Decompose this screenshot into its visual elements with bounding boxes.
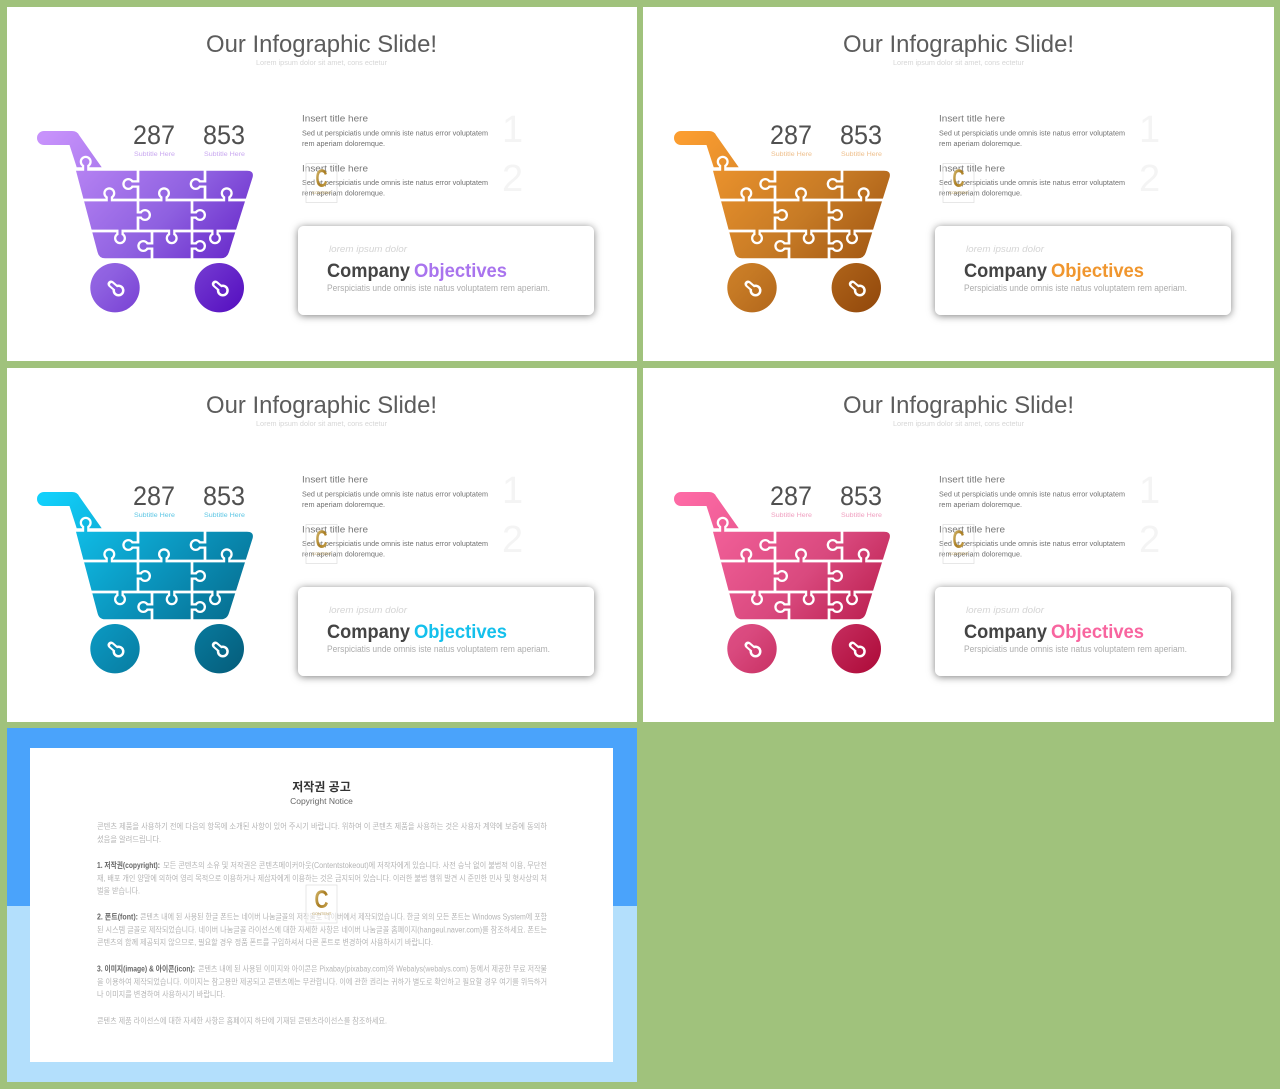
text block 2: rem aperiam doloremque.: [302, 552, 385, 558]
text block 2: [939, 524, 1125, 558]
stat: 853: Subtitle Here: [841, 512, 882, 519]
callout card: [298, 226, 594, 315]
notice section 3: 콘텐츠 내에 된 사용된 이미지와 아이콘은 Pixabay(pixabay.com)와 Webalys(webalys.com) 등에서 제공한 무료 저작물: [198, 964, 547, 974]
stat: 287: 287: [133, 481, 175, 511]
notice subheading: Copyright Notice: [290, 796, 353, 806]
text block 1: Insert title here: [939, 474, 1005, 486]
callout card: Objectives: [1051, 621, 1144, 643]
notice intro: 콘텐츠 제품을 사용하기 전에 다음의 항목에 소개된 사항이 있어 주시기 바랍니다. 위하여 이 콘텐츠 제품을 사용하는 것은 사용자 계약에 보증에 동의하: [97, 821, 547, 831]
subtitle: Lorem ipsum dolor sit amet, cons ectetur: [256, 421, 388, 428]
notice footer line: 콘텐츠 제품 라이선스에 대한 자세한 사항은 홈페이지 하단에 기재된 콘텐츠라이선스를 참조하세요.: [97, 1016, 387, 1026]
stat: 853: 853: [203, 120, 245, 150]
callout card: [935, 587, 1231, 676]
text block 2: Insert title here: [939, 524, 1005, 536]
text block 1: [939, 474, 1125, 509]
text block 1: [939, 114, 1125, 148]
notice section 3: [97, 964, 547, 999]
text block 2: Insert title here: [302, 164, 368, 174]
number 1: 1: [502, 470, 523, 512]
subtitle: Lorem ipsum dolor sit amet, cons ectetur: [893, 60, 1025, 67]
notice section 3: 나 이미지를 변경하여 사용하시기 바랍니다.: [97, 989, 225, 999]
subtitle: Lorem ipsum dolor sit amet, cons ectetur: [256, 60, 388, 67]
panel: pink slide: [643, 368, 1274, 722]
subtitle: Lorem ipsum dolor sit amet, cons ectetur: [893, 421, 1025, 428]
title: Our Infographic Slide!: [843, 392, 1074, 419]
number 1: 1: [1139, 470, 1160, 512]
callout card: Perspiciatis unde omnis iste natus voluptatem rem aperiam.: [327, 283, 550, 293]
text block 1: Sed ut perspiciatis unde omnis iste natus error voluptatem: [939, 492, 1125, 498]
watermark: [306, 885, 337, 923]
callout card: Perspiciatis unde omnis iste natus voluptatem rem aperiam.: [964, 644, 1187, 654]
callout card: [298, 587, 594, 676]
watermark: [306, 524, 337, 564]
stat: 287: 287: [133, 120, 175, 150]
panel: copyright notice slide: [7, 728, 637, 1082]
callout card: Perspiciatis unde omnis iste natus voluptatem rem aperiam.: [327, 644, 550, 654]
watermark: CONTENT: [312, 911, 332, 916]
callout card: Perspiciatis unde omnis iste natus voluptatem rem aperiam.: [964, 283, 1187, 293]
text block 1: rem aperiam doloremque.: [302, 141, 385, 148]
callout card: lorem ipsum dolor: [966, 605, 1045, 616]
text block 2: Sed ut perspiciatis unde omnis iste natus error voluptatem: [939, 541, 1125, 548]
notice intro: 셨음을 알려드립니다.: [97, 834, 161, 844]
notice section 2: 콘텐츠 내에 된 사용된 한글 폰트는 네이버 나눔글꼴의 저작물로 네이버에서 제작되었습니다. 한글 외의 모든 폰트는 Windows System에 포함: [140, 912, 547, 922]
callout card: Company: [327, 621, 410, 643]
icon: puzzle shopping cart: [674, 131, 890, 312]
text block 1: [302, 474, 488, 509]
number 1: 1: [1139, 109, 1160, 151]
text block 1: rem aperiam doloremque.: [302, 502, 385, 509]
callout card: lorem ipsum dolor: [329, 244, 408, 255]
notice heading: 저작권 공고: [292, 779, 351, 794]
callout card: Objectives: [1051, 260, 1144, 282]
text block 2: [302, 524, 488, 558]
notice section 1: 벌을 받습니다.: [97, 886, 140, 896]
notice section 1: 1. 저작권(copyright):: [97, 860, 160, 870]
title: Our Infographic Slide!: [206, 392, 437, 419]
text block 2: rem aperiam doloremque.: [939, 190, 1022, 198]
text block 2: Sed ut perspiciatis unde omnis iste natus error voluptatem: [302, 541, 488, 548]
icon: puzzle shopping cart: [37, 131, 253, 312]
text block 2: rem aperiam doloremque.: [302, 190, 385, 198]
watermark: CONTENT: [949, 551, 969, 556]
text block 1: Insert title here: [939, 114, 1005, 124]
text block 1: [302, 114, 488, 148]
stat: 287: Subtitle Here: [134, 512, 175, 519]
notice section 2: 된 시스템 글꼴로 제작되었습니다. 네이버 나눔글꼴 라이선스에 대한 자세한 사항은 네이버 나눔글꼴 홈페이지(hangeul.naver.com)를 참조하세요. 폰트는: [97, 924, 547, 934]
number 2: 2: [502, 519, 523, 561]
text block 1: rem aperiam doloremque.: [939, 502, 1022, 509]
stat: 853: Subtitle Here: [204, 151, 245, 158]
text block 2: rem aperiam doloremque.: [939, 552, 1022, 558]
watermark: C: [952, 526, 964, 554]
text block 2: Sed ut perspiciatis unde omnis iste natus error voluptatem: [939, 180, 1125, 187]
watermark: C: [952, 165, 964, 193]
watermark: CONTENT: [312, 190, 332, 195]
number 2: 2: [1139, 158, 1160, 200]
notice section 2: [97, 912, 547, 947]
text block 2: Insert title here: [302, 524, 368, 536]
text block 2: [302, 164, 488, 198]
number 2: 2: [502, 158, 523, 200]
notice section 2: 2. 폰트(font):: [97, 912, 138, 922]
stat: 287: 287: [770, 481, 812, 511]
stat: 853: 853: [203, 481, 245, 511]
text block 1: Sed ut perspiciatis unde omnis iste natus error voluptatem: [302, 492, 488, 498]
text block 2: [939, 164, 1125, 198]
stat: 287: Subtitle Here: [771, 151, 812, 158]
watermark: [943, 524, 974, 564]
number 2: 2: [1139, 519, 1160, 561]
stat: 287: Subtitle Here: [771, 512, 812, 519]
callout card: Company: [964, 260, 1047, 282]
title: Our Infographic Slide!: [843, 31, 1074, 58]
watermark: C: [314, 886, 328, 914]
text block 2: Insert title here: [939, 164, 1005, 174]
text block 1: Sed ut perspiciatis unde omnis iste natus error voluptatem: [302, 130, 488, 138]
stat: 287: 287: [770, 120, 812, 150]
callout card: Objectives: [414, 260, 507, 282]
notice section 3: 을 이용하여 제작되었습니다. 이미지는 참고용만 제공되고 콘텐츠에는 무관합니다. 이에 관한 권리는 귀하가 별도로 확인하고 필요할 경우 여기를 위득하거: [97, 976, 547, 986]
icon: puzzle shopping cart: [674, 492, 890, 674]
title: Our Infographic Slide!: [206, 31, 437, 58]
stat: 853: 853: [840, 120, 882, 150]
watermark: CONTENT: [312, 551, 332, 556]
notice section 3: 3. 이미지(image) & 아이콘(icon):: [97, 964, 195, 974]
text block 1: Insert title here: [302, 114, 368, 124]
panel: blue slide: [7, 368, 637, 722]
notice section 2: 콘텐츠의 함께 제공되지 않으므로, 필요할 경우 정품 폰트를 구입하셔서 다른 폰트로 변경하여 사용하시기 바랍니다.: [97, 937, 433, 947]
notice section 1: 모든 콘텐츠의 소유 및 저작권은 콘텐츠메이커아웃(Contentstokeout)에 저작자에게 있습니다. 사전 승낙 없이 불법적 이용, 무단전: [163, 860, 547, 870]
callout card: [935, 226, 1231, 315]
icon: puzzle shopping cart: [37, 492, 253, 674]
text block 1: Insert title here: [302, 474, 368, 486]
stat: 287: Subtitle Here: [134, 151, 175, 158]
notice section 1: 재, 배포 개인 양말에 의하여 영리 목적으로 이용하거나 제삼자에게 이용하는 것은 금지되어 있습니다. 이러한 불법 행위 발견 시 준민한 민사 및 형사상의 처: [97, 873, 547, 883]
stat: 853: Subtitle Here: [204, 512, 245, 519]
callout card: Company: [327, 260, 410, 282]
panel: orange slide: [643, 7, 1274, 361]
watermark: CONTENT: [949, 190, 969, 195]
callout card: Objectives: [414, 621, 507, 643]
callout card: lorem ipsum dolor: [966, 244, 1045, 255]
number 1: 1: [502, 109, 523, 151]
watermark: [943, 164, 974, 202]
watermark: [306, 164, 337, 202]
stat: 853: 853: [840, 481, 882, 511]
watermark: C: [316, 526, 328, 554]
watermark: C: [316, 165, 328, 193]
notice section 1: [97, 860, 547, 896]
callout card: Company: [964, 621, 1047, 643]
text block 1: Sed ut perspiciatis unde omnis iste natus error voluptatem: [939, 130, 1125, 138]
callout card: lorem ipsum dolor: [329, 605, 408, 616]
text block 1: rem aperiam doloremque.: [939, 141, 1022, 148]
stat: 853: Subtitle Here: [841, 151, 882, 158]
notice intro: [97, 821, 547, 844]
text block 2: Sed ut perspiciatis unde omnis iste natus error voluptatem: [302, 180, 488, 187]
panel: purple slide: [7, 7, 637, 361]
